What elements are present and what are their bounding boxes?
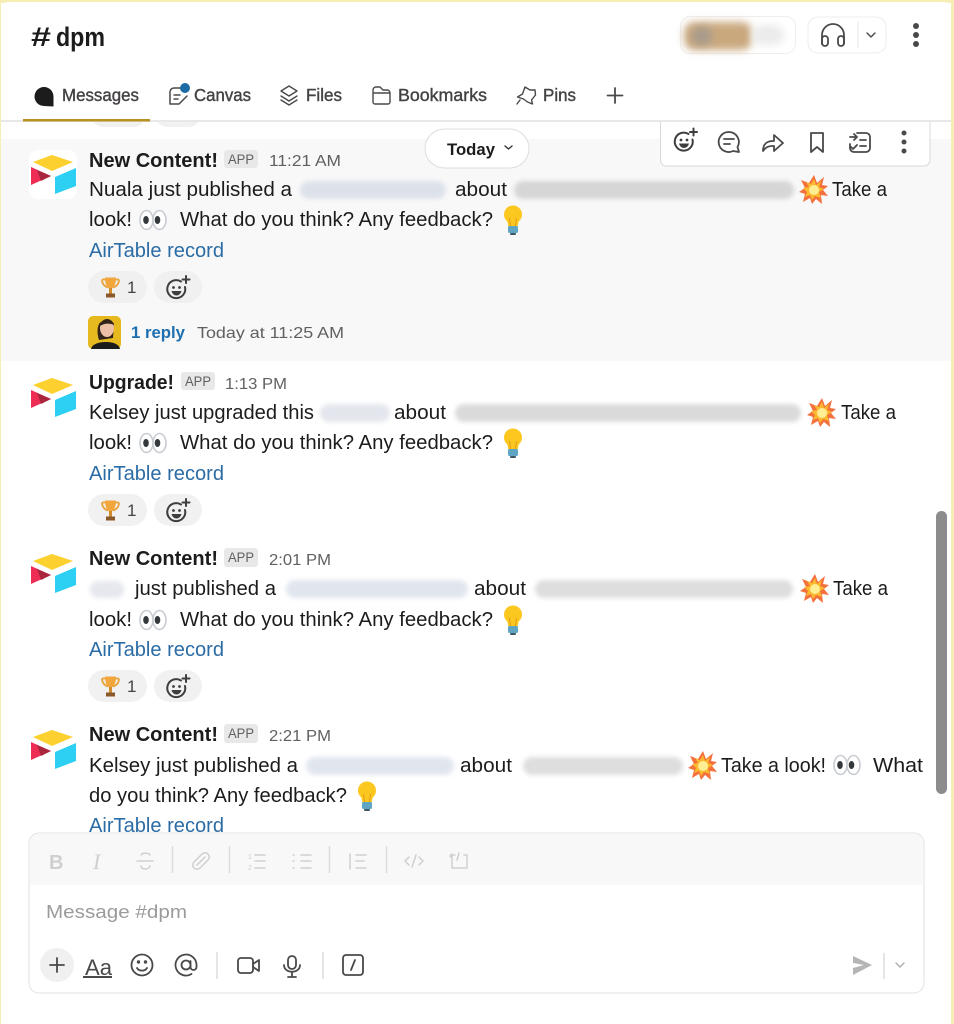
icon: mention <box>176 955 196 976</box>
icon: send options <box>896 963 904 967</box>
reactions: 1 <box>127 677 136 696</box>
icon: slash command <box>343 955 363 975</box>
message text: Take a look! <box>721 755 826 777</box>
reactions: 1 <box>127 501 136 520</box>
icon: reply <box>719 132 739 152</box>
link: AirTable record <box>89 639 224 661</box>
message text: Kelsey just upgraded this <box>89 402 314 424</box>
message text: about <box>394 402 446 424</box>
app logo <box>29 373 77 422</box>
app badge <box>224 724 258 743</box>
thread replies <box>88 316 344 349</box>
icon: video <box>238 958 259 973</box>
message text: look! <box>89 609 132 631</box>
message text: Take a <box>833 578 889 600</box>
icon: send <box>853 956 872 975</box>
icon: forward <box>763 135 783 151</box>
app logo <box>29 725 77 774</box>
tab: Bookmarks: Bookmarks <box>398 85 487 105</box>
thread replies: 1 reply <box>131 324 186 342</box>
message: New Content 2:21 PM <box>29 724 923 837</box>
message: New Content 2:01 PM <box>29 548 889 702</box>
tab: Messages: Messages <box>62 85 139 105</box>
sender name: Upgrade! <box>89 372 174 394</box>
formatting toolbar <box>30 834 923 885</box>
message text: Kelsey just published a <box>89 755 299 777</box>
icon: emoji <box>132 954 152 976</box>
message text <box>89 751 923 811</box>
formatting toolbar: I <box>92 849 102 874</box>
date pill: Today <box>447 140 496 159</box>
icon: attach <box>40 948 74 982</box>
tabs <box>34 83 622 106</box>
tab: Messages <box>34 85 139 106</box>
message text <box>89 574 889 635</box>
message text: Take a <box>832 179 888 201</box>
composer actions <box>40 948 904 982</box>
thread replies: Today at 11:25 AM <box>197 325 344 342</box>
tab: Files <box>281 85 342 105</box>
reactions <box>88 670 202 702</box>
message text: look! <box>89 432 132 454</box>
reactions <box>88 494 202 526</box>
tab: Canvas: Canvas <box>194 85 251 105</box>
message text: about <box>474 578 526 600</box>
app badge <box>224 548 258 567</box>
add tab <box>608 88 622 103</box>
message actions toolbar <box>660 122 930 166</box>
sender name: New Content! <box>89 150 218 172</box>
message text: Take a <box>841 402 897 424</box>
message text: What do you think? Any feedback? <box>180 209 493 231</box>
sender name: New Content! <box>89 724 218 746</box>
message text: about <box>455 179 507 201</box>
divider and active tab underline <box>1 120 951 122</box>
app badge: APP <box>228 550 254 565</box>
placeholder: Message #dpm <box>46 901 187 922</box>
reactions: 1 <box>127 278 136 297</box>
channel title: dpm <box>56 22 105 52</box>
timestamp: 2:01 PM <box>269 552 331 569</box>
link: AirTable record <box>89 815 224 837</box>
huddle button <box>808 17 886 53</box>
icon: add reaction <box>675 128 697 151</box>
timestamp: 2:21 PM <box>269 728 331 745</box>
link: AirTable record <box>89 463 224 485</box>
icon: more <box>902 130 906 154</box>
more menu <box>913 23 919 47</box>
message text <box>89 175 888 235</box>
partially hidden reaction pills <box>92 105 200 127</box>
tab: Files: Files <box>306 85 342 105</box>
message text: Nuala just published a <box>89 179 293 201</box>
highlighted message background <box>1 139 951 361</box>
blurred members button <box>680 16 796 54</box>
header <box>1 3 951 122</box>
icon: move to list <box>850 133 870 152</box>
app badge: APP <box>228 152 254 167</box>
message text: What do you think? Any feedback? <box>180 432 493 454</box>
link: AirTable record <box>89 240 224 262</box>
icon: formatting: Aa <box>85 955 113 980</box>
icon: bookmark <box>811 133 823 152</box>
tab: Pins: Pins <box>543 85 576 105</box>
app logo <box>29 549 77 598</box>
channel title <box>31 22 105 52</box>
message text: What <box>873 755 923 777</box>
icon: microphone <box>284 956 300 977</box>
tab: Canvas <box>170 83 251 105</box>
channel title: # <box>31 22 51 52</box>
message text: What do you think? Any feedback? <box>180 609 493 631</box>
message text <box>89 398 897 458</box>
message: Upgrade 1:13 PM <box>29 372 897 526</box>
formatting toolbar: 1 <box>248 854 252 861</box>
message composer <box>29 833 924 993</box>
app badge <box>181 372 215 390</box>
sender name: New Content! <box>89 548 218 570</box>
message: New Content 11:21 AM <box>29 150 888 349</box>
date pill <box>425 129 529 168</box>
app badge: APP <box>228 726 254 741</box>
scrollbar <box>936 511 947 794</box>
message text: about <box>460 755 512 777</box>
timestamp: 11:21 AM <box>269 153 341 170</box>
reactions <box>88 271 202 303</box>
message list <box>1 105 951 837</box>
app badge: APP <box>185 374 211 389</box>
message text: do you think? Any feedback? <box>89 785 347 807</box>
message text: just published a <box>134 578 277 600</box>
app logo <box>29 150 77 199</box>
timestamp: 1:13 PM <box>225 376 287 393</box>
app badge <box>224 150 258 168</box>
tab: Pins <box>517 85 576 105</box>
formatting toolbar: 2 <box>248 865 252 872</box>
formatting toolbar: B <box>49 852 63 874</box>
message text: look! <box>89 209 132 231</box>
